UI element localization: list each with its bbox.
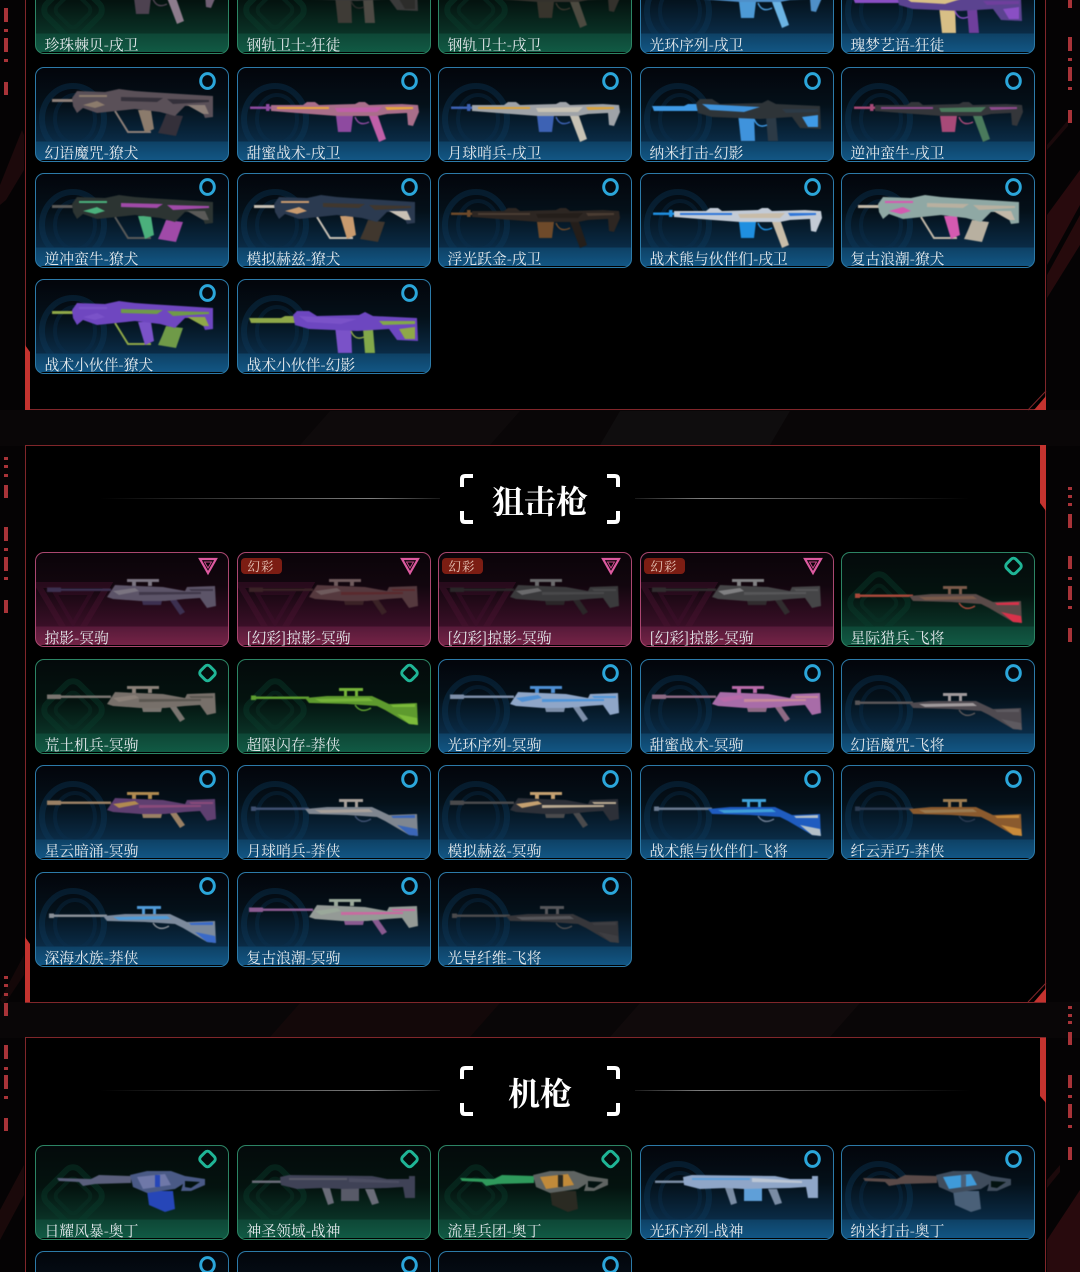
label: 钢轨卫士-戌卫	[448, 34, 541, 54]
gun	[438, 658, 632, 754]
card: 浮光跃金-戌卫	[438, 173, 632, 268]
gun	[640, 1144, 834, 1240]
label: 战术熊与伙伴们-戌卫	[650, 248, 788, 268]
card: 月球哨兵-戌卫	[438, 67, 632, 162]
gun	[46, 578, 216, 615]
card: 甜蜜战术-冥驹	[640, 659, 834, 754]
panel: machine guns frame	[25, 1037, 1046, 1272]
gun	[249, 101, 420, 142]
gun	[438, 1144, 632, 1240]
label: [幻彩]掠影-冥驹	[650, 626, 754, 647]
label: 逆冲蛮牛-獠犬	[44, 248, 138, 268]
label: 战术熊与伙伴们-飞将	[650, 840, 788, 860]
card: 超限闪存-莽侠	[237, 659, 431, 754]
panel: rifles frame	[25, 0, 1046, 410]
icon	[840, 552, 1034, 646]
label: 模拟赫兹-冥驹	[448, 840, 541, 860]
card: 幻语魔咒-獠犬	[35, 67, 229, 162]
card: 光导纤维-飞将	[438, 872, 632, 967]
label: 钢轨卫士-狂徒	[246, 34, 340, 54]
icon	[34, 872, 228, 966]
gun	[34, 658, 228, 754]
label: 流星兵团-奥丁	[448, 1220, 541, 1240]
right side dashes	[1068, 0, 1072, 1160]
card: [幻彩]掠影-冥驹 3	[640, 552, 834, 647]
card: 星云暗涌-冥驹	[35, 765, 229, 860]
gun	[840, 658, 1034, 754]
label: 甜蜜战术-戌卫	[246, 142, 340, 162]
icon	[438, 1250, 632, 1272]
card: 甜蜜战术-戌卫	[237, 67, 431, 162]
card: 复古浪潮-獠犬	[841, 173, 1035, 268]
heading ornament: line and brackets	[100, 1065, 980, 1117]
icon	[804, 72, 821, 90]
gun	[134, 0, 215, 24]
gun	[34, 1144, 228, 1240]
label: [幻彩]掠影-冥驹	[448, 626, 552, 647]
heading text: 狙击枪	[492, 477, 588, 523]
icon	[1005, 72, 1022, 90]
heading: 狙击枪	[118, 474, 952, 524]
card: partially visible 3	[438, 1251, 632, 1272]
icon	[804, 178, 821, 196]
card: 逆冲蛮牛-戌卫	[841, 67, 1035, 162]
gun	[438, 872, 632, 966]
icon	[438, 1144, 632, 1240]
icon	[401, 284, 418, 302]
gun	[450, 578, 620, 615]
card: [幻彩]掠影-冥驹 1	[237, 552, 431, 647]
gun	[840, 1144, 1034, 1240]
icon	[236, 658, 430, 754]
label: 纳米打击-幻影	[650, 142, 743, 162]
card: 光环序列-冥驹	[438, 659, 632, 754]
card: 日耀风暴-奥丁	[35, 1145, 229, 1240]
gun	[236, 654, 430, 748]
card: 掠影-冥驹	[35, 552, 229, 647]
gun	[450, 101, 621, 142]
label: 光环序列-戌卫	[650, 34, 743, 54]
icon	[640, 764, 834, 860]
label: 神圣领域-战神	[246, 1220, 340, 1240]
gun	[640, 552, 834, 646]
label: 纤云弄巧-莽侠	[850, 840, 944, 860]
gun	[652, 207, 823, 248]
label: 复古浪潮-獠犬	[850, 248, 944, 268]
card: 珍珠棘贝-戌卫	[35, 0, 229, 54]
card: 神圣领域-战神	[237, 1145, 431, 1240]
gun	[51, 300, 214, 348]
icon	[401, 178, 418, 196]
gun	[705, 0, 822, 28]
icon	[601, 558, 621, 576]
gun	[236, 764, 430, 860]
card: 逆冲蛮牛-獠犬	[35, 173, 229, 268]
icon	[34, 1250, 228, 1272]
icon	[400, 558, 420, 576]
gun	[34, 764, 228, 860]
gun	[640, 658, 834, 754]
gun	[52, 194, 214, 242]
label: 纳米打击-奥丁	[850, 1220, 944, 1240]
tag: 幻彩	[448, 556, 476, 574]
heading: 机枪	[100, 1065, 980, 1117]
tag	[644, 558, 684, 574]
card: 流星兵团-奥丁	[438, 1145, 632, 1240]
icon	[236, 1144, 430, 1240]
card: 星际猎兵-飞将	[841, 552, 1035, 647]
gun	[236, 1144, 430, 1240]
card: 战术熊与伙伴们-飞将	[640, 765, 834, 860]
label: 光导纤维-飞将	[448, 946, 541, 967]
label: 深海水族-莽侠	[44, 946, 138, 967]
card: partially visible 1	[35, 1251, 229, 1272]
label: 光环序列-冥驹	[448, 734, 541, 754]
icon	[34, 658, 228, 754]
icon	[236, 764, 430, 860]
label: 瑰梦艺语-狂徒	[850, 34, 944, 54]
gun	[236, 872, 430, 966]
gun	[34, 872, 228, 966]
label: 逆冲蛮牛-戌卫	[850, 142, 944, 162]
heading text: 机枪	[508, 1069, 572, 1115]
card: 光环序列-战神	[640, 1145, 834, 1240]
card: 模拟赫兹-冥驹	[438, 765, 632, 860]
card: 荒土机兵-冥驹	[35, 659, 229, 754]
icon	[401, 72, 418, 90]
label: 日耀风暴-奥丁	[44, 1220, 138, 1240]
tag	[442, 558, 482, 574]
icon	[1005, 178, 1022, 196]
card: 瑰梦艺语-狂徒	[841, 0, 1035, 54]
gun	[51, 88, 214, 136]
icon	[840, 764, 1034, 860]
card: 幻语魔咒-飞将	[841, 659, 1035, 754]
label: 珍珠棘贝-戌卫	[44, 34, 138, 54]
tag	[240, 558, 282, 574]
label: 星云暗涌-冥驹	[44, 840, 138, 860]
label: 月球哨兵-莽侠	[246, 840, 340, 860]
card: 月球哨兵-莽侠	[237, 765, 431, 860]
symbol library	[0, 0, 3, 3]
label: 光环序列-战神	[650, 1220, 743, 1240]
icon	[640, 658, 834, 754]
card: 模拟赫兹-獠犬	[237, 173, 431, 268]
icon	[199, 284, 216, 302]
left side dashes	[4, 8, 8, 1131]
card: 战术熊与伙伴们-戌卫	[640, 173, 834, 268]
label: 幻语魔咒-飞将	[850, 734, 944, 754]
card: 光环序列-戌卫	[640, 0, 834, 54]
gun	[248, 578, 418, 614]
gun	[840, 764, 1034, 860]
gun	[853, 102, 1024, 142]
gun	[652, 98, 822, 142]
icon	[602, 178, 619, 196]
label: 复古浪潮-冥驹	[246, 946, 340, 967]
gun	[248, 310, 419, 354]
card: 钢轨卫士-戌卫	[438, 0, 632, 54]
icon	[840, 658, 1034, 754]
label: 月球哨兵-戌卫	[448, 142, 541, 162]
tag: 幻彩	[247, 556, 274, 574]
label: 模拟赫兹-獠犬	[246, 248, 340, 268]
icon	[840, 1144, 1034, 1240]
label: 星际猎兵-飞将	[850, 626, 944, 647]
card: 复古浪潮-冥驹	[237, 872, 431, 967]
icon	[34, 764, 228, 860]
heading ornament: line and brackets	[118, 474, 952, 524]
label: 掠影-冥驹	[44, 626, 109, 647]
icon	[236, 872, 430, 966]
gun	[857, 194, 1020, 243]
gun	[853, 0, 1022, 34]
icon	[236, 1250, 430, 1272]
label: [幻彩]掠影-冥驹	[246, 626, 351, 647]
card: 钢轨卫士-狂徒	[237, 0, 431, 54]
tag: 幻彩	[650, 556, 678, 574]
icon	[199, 178, 216, 196]
label: 超限闪存-莽侠	[246, 734, 340, 754]
gun	[507, 0, 620, 28]
gun	[438, 764, 632, 860]
icon	[199, 72, 216, 90]
icon	[438, 658, 632, 754]
gun	[840, 552, 1034, 646]
card: 纳米打击-奥丁	[841, 1145, 1035, 1240]
label: 幻语魔咒-獠犬	[44, 142, 138, 162]
icon	[640, 1144, 834, 1240]
panel: snipers frame	[25, 445, 1046, 1003]
gun	[325, 0, 418, 24]
label: 甜蜜战术-冥驹	[650, 734, 743, 754]
gun	[640, 764, 834, 860]
gun	[450, 208, 620, 248]
card: 纳米打击-幻影	[640, 67, 834, 162]
card: [幻彩]掠影-冥驹 2	[438, 552, 632, 647]
label: 荒土机兵-冥驹	[44, 734, 138, 754]
card: 深海水族-莽侠	[35, 872, 229, 967]
icon	[438, 764, 632, 860]
card: 纤云弄巧-莽侠	[841, 765, 1035, 860]
card: 战术小伙伴-幻影	[237, 279, 431, 374]
card: partially visible 2	[237, 1251, 431, 1272]
label: 浮光跃金-戌卫	[448, 248, 541, 268]
icon	[640, 552, 834, 646]
icon	[34, 1144, 228, 1240]
gun	[253, 194, 416, 242]
icon	[602, 72, 619, 90]
label: 战术小伙伴-幻影	[246, 354, 355, 374]
label: 战术小伙伴-獠犬	[44, 354, 153, 374]
icon	[198, 558, 218, 576]
icon	[438, 872, 632, 966]
card: 战术小伙伴-獠犬	[35, 279, 229, 374]
